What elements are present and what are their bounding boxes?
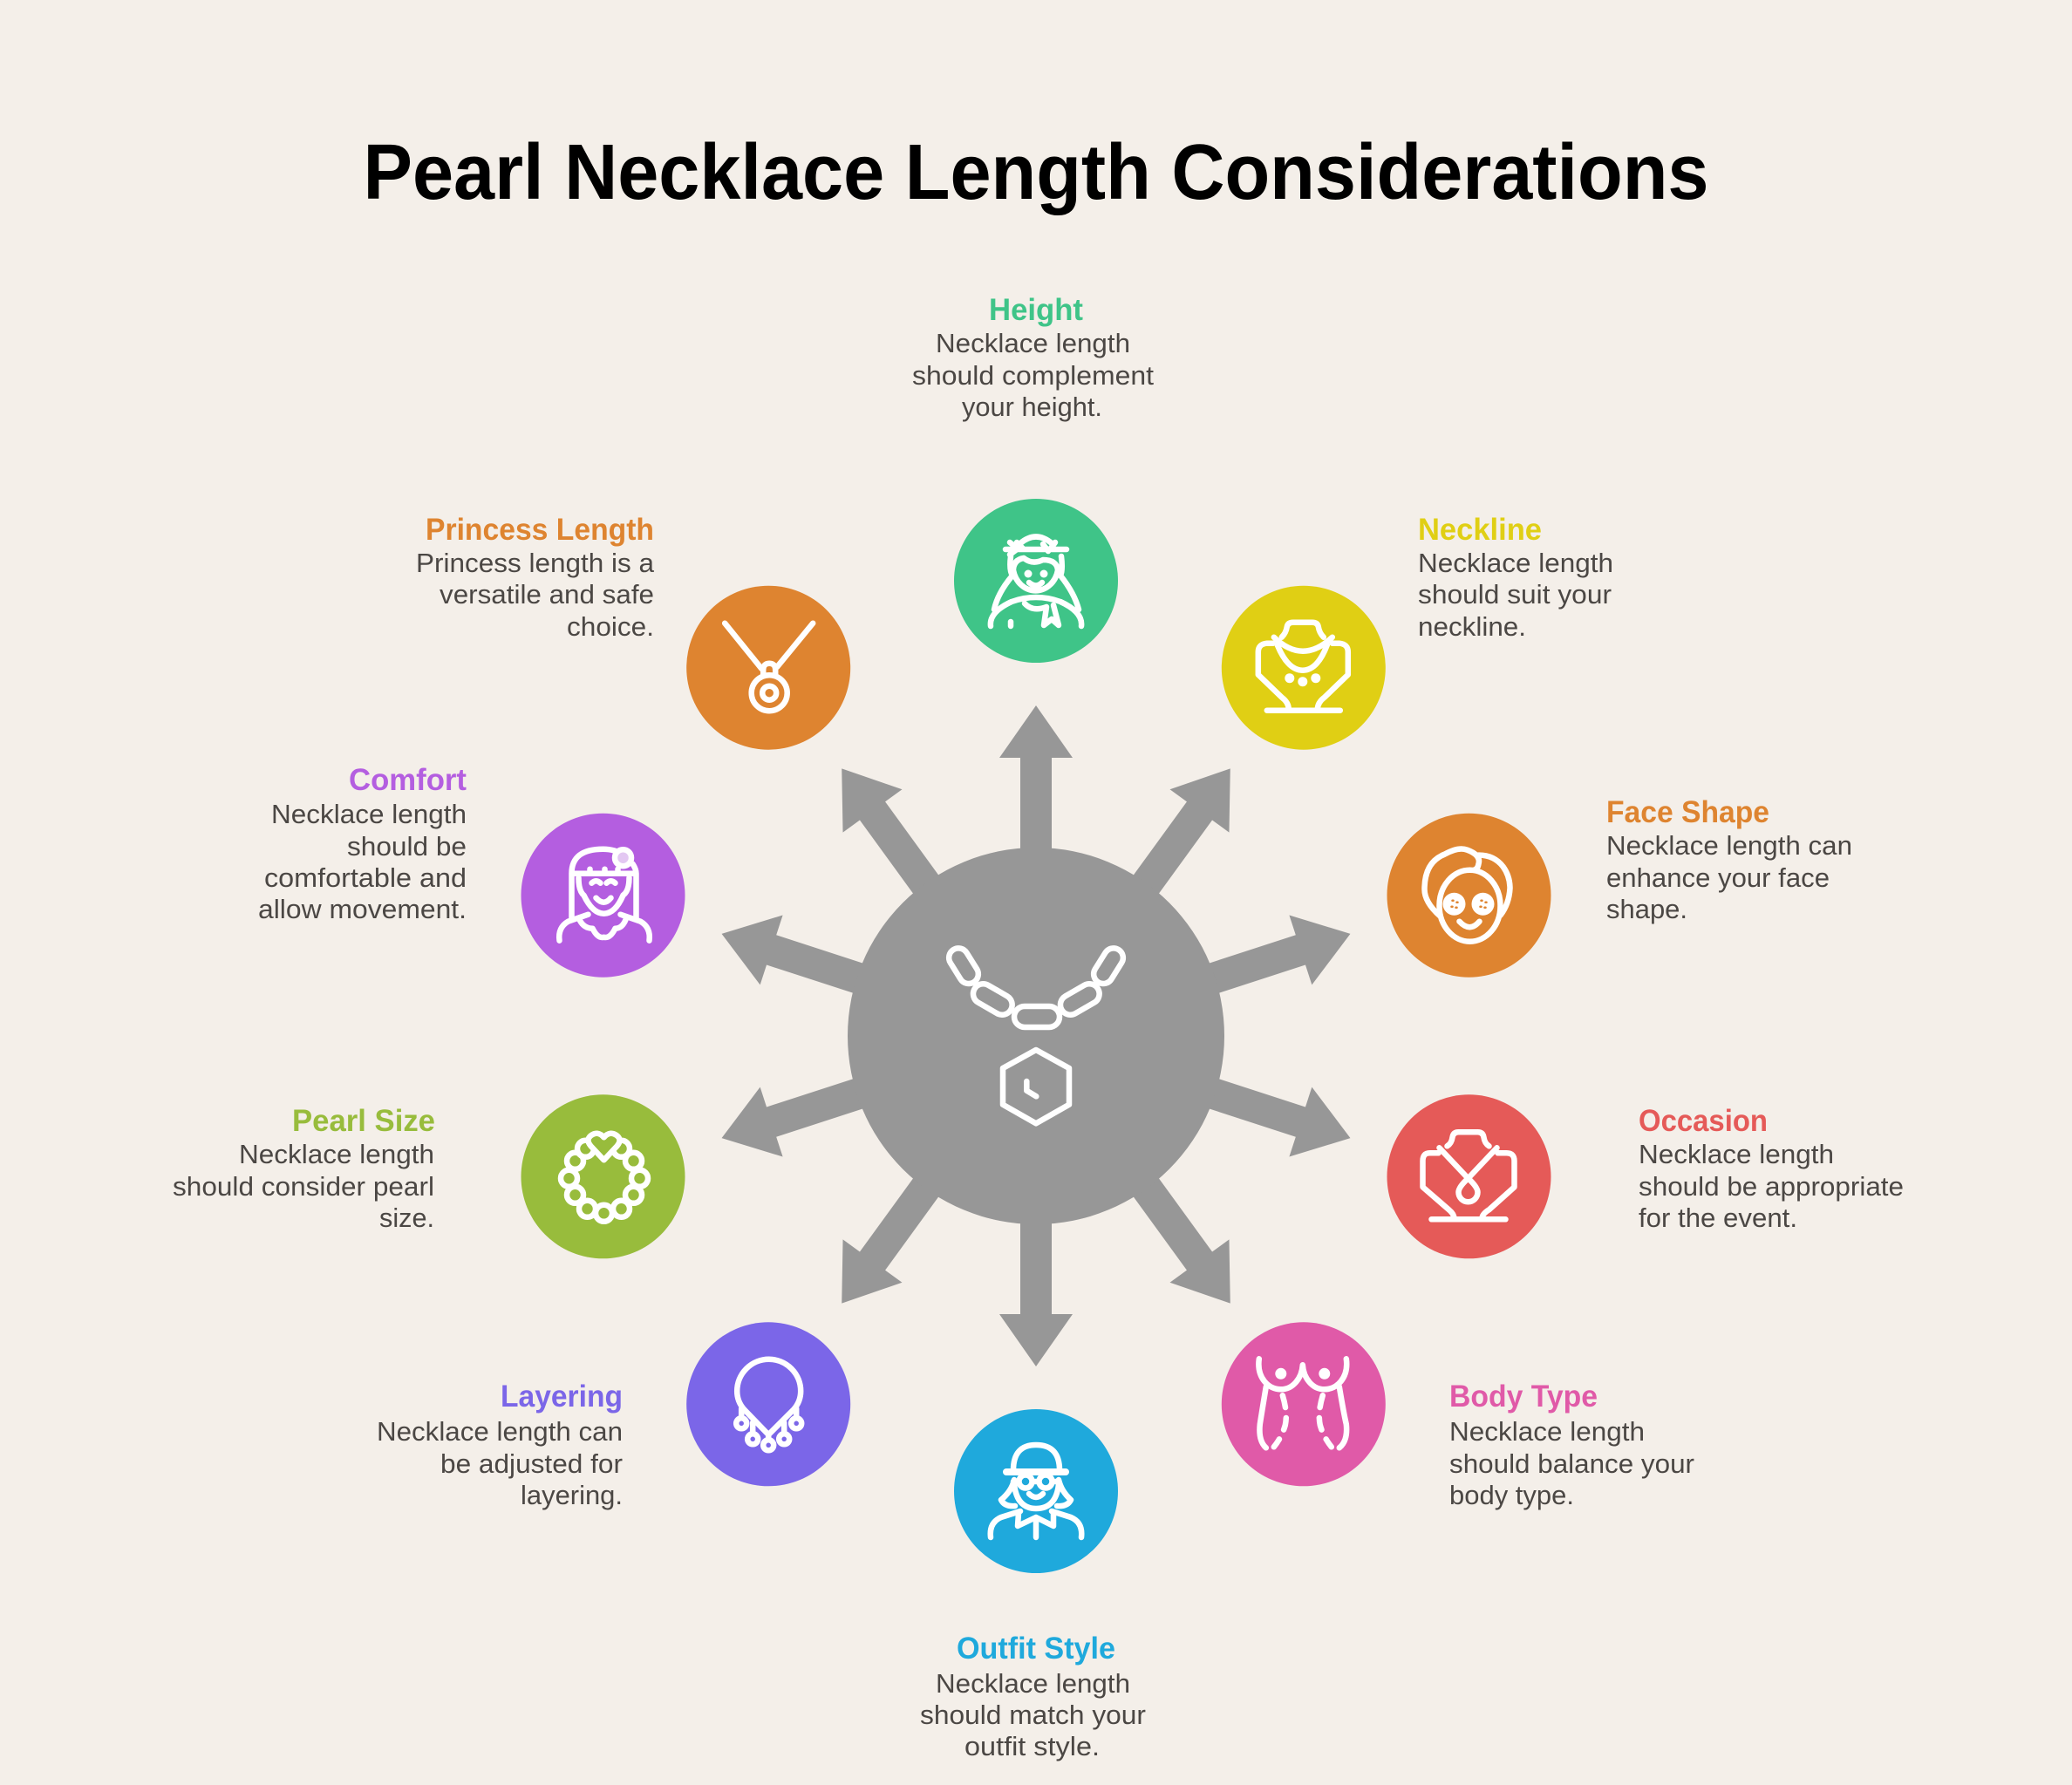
arrow: to Face Shape bbox=[1189, 899, 1361, 1018]
description: Neckline: neckline. bbox=[1418, 611, 1526, 642]
description: Face Shape bbox=[1606, 830, 1852, 924]
central hub with necklace icon bbox=[848, 848, 1224, 1224]
description: Outfit Style: should match your bbox=[920, 1700, 1146, 1730]
icon: woman with flower in hair bbox=[521, 814, 685, 978]
description: Princess Length: versatile and safe bbox=[440, 579, 654, 610]
description: Princess Length bbox=[416, 548, 655, 642]
description: Face Shape: shape. bbox=[1606, 894, 1687, 924]
description: Outfit Style: Necklace length bbox=[936, 1668, 1130, 1699]
arrow: to Princess Length bbox=[812, 747, 964, 918]
heading: Layering: Layering bbox=[501, 1380, 623, 1414]
arrow: to Comfort bbox=[711, 899, 883, 1018]
description: Outfit Style: outfit style. bbox=[964, 1731, 1100, 1761]
icon: pendant necklace bbox=[686, 586, 850, 750]
heading: Pearl Size: Pearl Size bbox=[292, 1104, 435, 1138]
arrows radiating from hub bbox=[711, 705, 1361, 1366]
description: Layering: Necklace length can bbox=[377, 1416, 623, 1447]
description: Princess Length: choice. bbox=[567, 611, 654, 642]
description: Height: Necklace length bbox=[936, 328, 1130, 358]
description: Body Type: body type. bbox=[1449, 1480, 1574, 1510]
icon: hexagon clock pendant bbox=[1003, 1050, 1069, 1123]
panel: Comfort bbox=[258, 763, 685, 978]
panel: Outfit Style bbox=[920, 1409, 1146, 1761]
description: Face Shape: enhance your face bbox=[1606, 862, 1830, 893]
panel: Face Shape bbox=[1387, 795, 1852, 978]
description: Height: your height. bbox=[962, 392, 1102, 422]
icon: woman with wreath bbox=[954, 499, 1118, 663]
panel: Princess Length bbox=[416, 513, 850, 750]
description: Height bbox=[912, 328, 1154, 422]
arrow: to Neckline bbox=[1108, 747, 1260, 918]
panel: Height bbox=[912, 293, 1154, 663]
panel: Body Type bbox=[1222, 1322, 1694, 1510]
arrow: to Pearl Size bbox=[711, 1054, 883, 1173]
panel: Occasion bbox=[1387, 1094, 1904, 1258]
arrow: to Occasion bbox=[1189, 1054, 1361, 1173]
description: Outfit Style bbox=[920, 1668, 1146, 1761]
description: Neckline: should suit your bbox=[1418, 579, 1612, 610]
arrow: to Layering bbox=[812, 1154, 964, 1325]
panel: Neckline bbox=[1222, 513, 1613, 750]
description: Pearl Size: size. bbox=[379, 1202, 434, 1233]
description: Body Type bbox=[1449, 1416, 1694, 1510]
description: Height: should complement bbox=[912, 360, 1154, 391]
description: Pearl Size: should consider pearl bbox=[173, 1171, 434, 1202]
heading: Comfort: Comfort bbox=[349, 763, 467, 797]
heading: Neckline: Neckline bbox=[1418, 513, 1542, 547]
description: Comfort: Necklace length bbox=[271, 799, 467, 829]
description: Pearl Size: Necklace length bbox=[239, 1139, 434, 1169]
description: Occasion: should be appropriate bbox=[1639, 1171, 1904, 1202]
description: Comfort: allow movement. bbox=[258, 894, 467, 924]
icon: bust with drop necklace bbox=[1387, 1094, 1551, 1258]
heading: Outfit Style: Outfit Style bbox=[957, 1632, 1115, 1666]
description: Neckline: Necklace length bbox=[1418, 548, 1613, 578]
arrow: to Outfit Style bbox=[999, 1209, 1073, 1366]
icon: bust with necklace bbox=[1222, 586, 1386, 750]
arrow: to Body Type bbox=[1108, 1154, 1260, 1325]
description: Occasion bbox=[1639, 1139, 1904, 1233]
heading: Princess Length: Princess Length bbox=[426, 513, 654, 547]
description: Layering bbox=[377, 1416, 623, 1510]
description: Occasion: Necklace length bbox=[1639, 1139, 1834, 1169]
description: Pearl Size bbox=[173, 1139, 434, 1233]
description: Neckline bbox=[1418, 548, 1613, 642]
title: Pearl Necklace Length Considerations bbox=[363, 129, 1709, 216]
icon: chain necklace bbox=[945, 944, 1127, 1027]
description: Comfort: should be bbox=[347, 831, 467, 862]
heading: Occasion: Occasion bbox=[1639, 1104, 1768, 1138]
heading: Body Type: Body Type bbox=[1449, 1380, 1598, 1414]
description: Body Type: should balance your bbox=[1449, 1448, 1694, 1479]
icon: woman with hat and glasses bbox=[954, 1409, 1118, 1573]
description: Comfort bbox=[258, 799, 467, 924]
panel: Layering bbox=[377, 1322, 850, 1510]
description: Body Type: Necklace length bbox=[1449, 1416, 1645, 1447]
icon: face with cucumber mask bbox=[1387, 814, 1551, 978]
arrow: to Height bbox=[999, 705, 1073, 863]
heading: Face Shape: Face Shape bbox=[1606, 795, 1769, 829]
heading: Height: Height bbox=[989, 293, 1083, 327]
description: Layering: be adjusted for bbox=[440, 1448, 623, 1479]
description: Layering: layering. bbox=[521, 1480, 623, 1510]
description: Face Shape: Necklace length can bbox=[1606, 830, 1852, 861]
description: Comfort: comfortable and bbox=[264, 862, 467, 893]
icon: bead drop necklace bbox=[686, 1322, 850, 1486]
icon: pearl bracelet with heart bbox=[521, 1094, 685, 1258]
panel: Pearl Size bbox=[173, 1094, 685, 1258]
icon: torso outline bbox=[1222, 1322, 1386, 1486]
description: Occasion: for the event. bbox=[1639, 1202, 1797, 1233]
description: Princess Length: Princess length is a bbox=[416, 548, 655, 578]
